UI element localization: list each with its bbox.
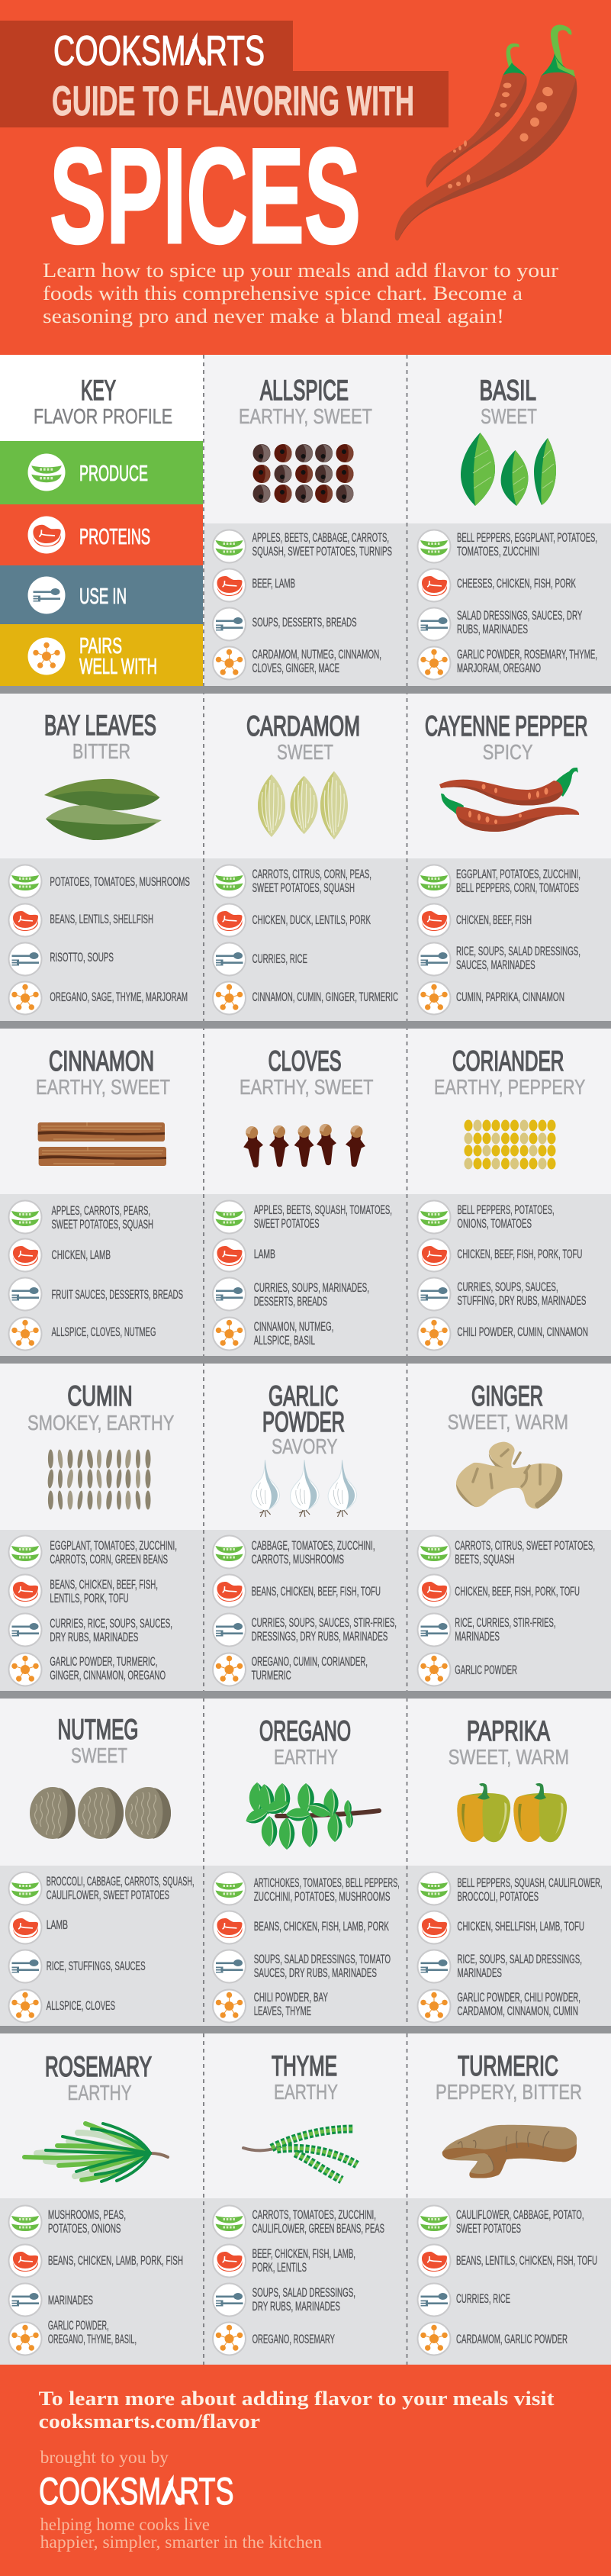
nutmeg flavor: SWEET bbox=[71, 1744, 127, 1767]
key row: produce bbox=[0, 441, 203, 504]
pairs well with bbox=[9, 2318, 137, 2355]
call to action bbox=[39, 2388, 555, 2433]
produce bbox=[418, 530, 597, 563]
proteins bbox=[418, 1911, 584, 1944]
proteins: BEEF, LAMB bbox=[252, 576, 295, 591]
bay leaves flavor: BITTER bbox=[72, 739, 130, 763]
use in bbox=[9, 1277, 183, 1311]
pairs well with: OREGANO, ROSEMARY bbox=[252, 2332, 335, 2346]
illustration: basil leaves bbox=[461, 433, 556, 506]
ginger flavor: SWEET, WARM bbox=[448, 1410, 568, 1434]
flavor profile label: FLAVOR PROFILE bbox=[34, 404, 172, 428]
panel: key bbox=[0, 374, 203, 686]
thyme flavor: EARTHY bbox=[274, 2080, 338, 2104]
pairs well with: CLOVES, GINGER, MACE bbox=[252, 661, 339, 675]
panel: cumin bbox=[9, 1380, 177, 1686]
produce bbox=[9, 1872, 194, 1905]
proteins bbox=[213, 1911, 389, 1944]
use in bbox=[213, 1613, 397, 1647]
produce: BEETS, SQUASH bbox=[455, 1552, 514, 1567]
produce: BROCCOLI, CABBAGE, CARROTS, SQUASH, bbox=[47, 1874, 194, 1889]
use in: RUBS, MARINADES bbox=[457, 622, 528, 636]
intro paragraph: Learn how to spice up your meals and add flavor to your bbox=[43, 259, 558, 282]
proteins bbox=[213, 1239, 275, 1271]
tagline bbox=[40, 2515, 323, 2552]
proteins: CHICKEN, BEEF, FISH bbox=[456, 913, 532, 927]
key row: produce: PRODUCE bbox=[79, 462, 148, 486]
produce bbox=[9, 1535, 177, 1569]
illustration: garlic bulbs bbox=[251, 1460, 357, 1517]
use in: MARINADES bbox=[48, 2293, 93, 2307]
oregano flavor: EARTHY bbox=[274, 1745, 338, 1769]
key row: pairs well with: WELL WITH bbox=[79, 655, 157, 679]
use in: MARINADES bbox=[455, 1629, 500, 1644]
panel: oregano bbox=[213, 1715, 400, 2022]
use in: DRY RUBS, MARINADES bbox=[252, 2299, 340, 2314]
pairs well with: ALLSPICE, BASIL bbox=[254, 1333, 315, 1348]
illustration: cloves bbox=[241, 1123, 367, 1168]
panel: cayenne pepper bbox=[418, 710, 587, 1015]
pairs well with bbox=[9, 1317, 156, 1351]
produce: SWEET POTATOES, SQUASH bbox=[52, 1217, 153, 1232]
key row: proteins: PROTEINS bbox=[79, 525, 150, 549]
panel: coriander bbox=[418, 1045, 588, 1351]
pairs well with: ALLSPICE, CLOVES, NUTMEG bbox=[52, 1325, 156, 1339]
proteins: BEANS, CHICKEN, FISH, LAMB, PORK bbox=[254, 1919, 389, 1934]
intro paragraph bbox=[43, 259, 558, 327]
call to action: To learn more about adding flavor to your meals visit bbox=[39, 2388, 555, 2410]
key heading: KEY bbox=[81, 374, 116, 406]
proteins bbox=[418, 2245, 597, 2277]
cardamom name: CARDAMOM bbox=[246, 710, 360, 742]
pairs well with bbox=[213, 1990, 328, 2022]
cardamom flavor: SWEET bbox=[277, 740, 333, 764]
produce: ONIONS, TOMATOES bbox=[457, 1216, 532, 1231]
use in bbox=[213, 607, 357, 641]
use in: RISOTTO, SOUPS bbox=[50, 950, 114, 964]
pairs well with: OREGANO, CUMIN, CORIANDER, bbox=[252, 1654, 368, 1669]
use in: CURRIES, RICE bbox=[252, 952, 307, 966]
proteins bbox=[418, 1239, 582, 1271]
tagline: helping home cooks live bbox=[40, 2515, 210, 2534]
proteins: BEANS, CHICKEN, LAMB, PORK, FISH bbox=[48, 2253, 183, 2268]
pairs well with: CHILI POWDER, BAY bbox=[254, 1990, 328, 2004]
produce bbox=[213, 1201, 392, 1233]
use in: CURRIES, RICE bbox=[456, 2291, 510, 2306]
use in: CURRIES, SOUPS, SAUCES, STIR-FRIES, bbox=[252, 1615, 397, 1630]
illustration: nutmeg seeds bbox=[30, 1787, 171, 1839]
pairs well with bbox=[213, 2323, 335, 2355]
use in: RICE, STUFFINGS, SAUCES bbox=[47, 1959, 146, 1973]
intro paragraph: foods with this comprehensive spice chart. Become a bbox=[43, 282, 523, 304]
use in bbox=[418, 943, 580, 975]
produce: MUSHROOMS, PEAS, bbox=[48, 2207, 126, 2222]
use in: SOUPS, SALAD DRESSINGS, TOMATO bbox=[254, 1952, 391, 1966]
pairs well with: TURMERIC bbox=[252, 1668, 291, 1682]
use in bbox=[9, 1613, 172, 1647]
turmeric name: TURMERIC bbox=[458, 2050, 558, 2082]
produce: ZUCCHINI, POTATOES, MUSHROOMS bbox=[254, 1889, 391, 1904]
proteins bbox=[9, 903, 153, 937]
panel: ginger bbox=[418, 1380, 595, 1686]
pairs well with: GARLIC POWDER, TURMERIC, bbox=[50, 1654, 157, 1669]
produce bbox=[213, 2205, 384, 2239]
use in: SAUCES, MARINADES bbox=[456, 958, 535, 972]
panel: garlic powder bbox=[213, 1380, 397, 1686]
use in: DRY RUBS, MARINADES bbox=[50, 1630, 138, 1644]
cumin name: CUMIN bbox=[67, 1380, 133, 1412]
rosemary flavor: EARTHY bbox=[67, 2081, 132, 2104]
produce: CAULIFLOWER, GREEN BEANS, PEAS bbox=[252, 2221, 384, 2236]
pairs well with: CINNAMON, CUMIN, GINGER, TURMERIC bbox=[252, 990, 398, 1004]
brought to you by: brought to you by bbox=[40, 2448, 169, 2467]
proteins bbox=[418, 1575, 580, 1607]
proteins bbox=[9, 1575, 158, 1607]
produce: SQUASH, SWEET POTATOES, TURNIPS bbox=[252, 544, 392, 559]
produce: ARTICHOKES, TOMATOES, BELL PEPPERS, bbox=[254, 1876, 400, 1890]
produce bbox=[213, 1872, 400, 1905]
thyme name: THYME bbox=[272, 2050, 337, 2082]
use in: SOUPS, DESSERTS, BREADS bbox=[252, 615, 357, 630]
panel: turmeric bbox=[418, 2050, 597, 2355]
key row: use in bbox=[0, 565, 203, 624]
illustration: bay leaves bbox=[44, 779, 162, 840]
illustration: allspice berries bbox=[253, 444, 354, 503]
produce: CAULIFLOWER, SWEET POTATOES bbox=[47, 1888, 169, 1902]
footer band bbox=[0, 2365, 611, 2576]
use in bbox=[213, 943, 307, 975]
produce: EGGPLANT, TOMATOES, ZUCCHINI, bbox=[50, 1538, 177, 1553]
illustration: oregano sprig bbox=[243, 1782, 379, 1850]
produce bbox=[9, 2205, 126, 2239]
tagline: happier, simpler, smarter in the kitchen bbox=[40, 2533, 323, 2552]
produce: SWEET POTATOES bbox=[456, 2221, 521, 2236]
proteins: LAMB bbox=[47, 1918, 68, 1932]
pairs well with bbox=[9, 981, 188, 1015]
pairs well with: GARLIC POWDER bbox=[455, 1663, 517, 1677]
garlic powder name bbox=[262, 1380, 345, 1438]
produce bbox=[418, 2205, 584, 2239]
pairs well with: GARLIC POWDER, bbox=[48, 2318, 109, 2333]
proteins bbox=[418, 569, 576, 601]
proteins bbox=[213, 569, 295, 601]
produce bbox=[213, 1535, 375, 1569]
pairs well with bbox=[418, 647, 597, 679]
illustration: coriander seeds bbox=[464, 1120, 555, 1169]
footer logo: COOKSMARTS bbox=[39, 2470, 234, 2513]
use in bbox=[213, 1277, 369, 1311]
proteins: BEANS, LENTILS, SHELLFISH bbox=[50, 912, 153, 926]
pairs well with bbox=[418, 1317, 588, 1351]
use in bbox=[418, 1277, 586, 1311]
paprika flavor: SWEET, WARM bbox=[449, 1745, 569, 1769]
ginger name: GINGER bbox=[471, 1380, 543, 1412]
panel: cloves bbox=[213, 1045, 392, 1351]
illustration: cumin seeds bbox=[47, 1449, 151, 1510]
illustration: ginger root bbox=[456, 1442, 562, 1509]
proteins bbox=[9, 2245, 183, 2277]
produce: POTATOES, TOMATOES, MUSHROOMS bbox=[50, 874, 190, 889]
proteins bbox=[418, 903, 532, 937]
garlic powder name: POWDER bbox=[262, 1406, 345, 1438]
produce: CARROTS, MUSHROOMS bbox=[252, 1552, 344, 1567]
produce: APPLES, BEETS, SQUASH, TOMATOES, bbox=[254, 1203, 392, 1217]
call to action: cooksmarts.com/flavor bbox=[39, 2410, 260, 2433]
oregano name: OREGANO bbox=[259, 1715, 351, 1747]
use in: DRESSINGS, DRY RUBS, MARINADES bbox=[252, 1629, 388, 1644]
pairs well with: GINGER, CINNAMON, OREGANO bbox=[50, 1668, 166, 1682]
illustration: paprika peppers bbox=[457, 1783, 567, 1842]
produce bbox=[418, 1535, 595, 1569]
use in bbox=[213, 1950, 391, 1982]
guide band bbox=[0, 71, 449, 127]
produce: CARROTS, CITRUS, CORN, PEAS, bbox=[252, 867, 371, 881]
pairs well with: OREGANO, THYME, BASIL, bbox=[48, 2332, 137, 2346]
garlic powder name: GARLIC bbox=[269, 1380, 339, 1412]
proteins: BEANS, CHICKEN, BEEF, FISH, TOFU bbox=[252, 1584, 381, 1599]
panel: nutmeg bbox=[9, 1713, 194, 2022]
pairs well with bbox=[9, 1990, 115, 2022]
produce: CARROTS, TOMATOES, ZUCCHINI, bbox=[252, 2207, 376, 2222]
produce bbox=[418, 1201, 555, 1233]
proteins bbox=[213, 2245, 355, 2277]
illustration: cardamom pods bbox=[258, 771, 348, 839]
produce bbox=[213, 530, 392, 563]
basil name: BASIL bbox=[479, 374, 536, 406]
produce: BROCCOLI, POTATOES bbox=[457, 1889, 539, 1904]
produce: SWEET POTATOES, SQUASH bbox=[252, 881, 355, 895]
pairs well with bbox=[418, 2323, 568, 2355]
key row: pairs well with: PAIRS bbox=[79, 634, 122, 658]
produce: POTATOES, ONIONS bbox=[48, 2221, 121, 2236]
produce bbox=[418, 1872, 603, 1905]
panel: cardamom bbox=[213, 710, 398, 1015]
intro paragraph: seasoning pro and never make a bland meal again! bbox=[43, 305, 504, 327]
pairs well with bbox=[213, 1317, 333, 1351]
proteins: LAMB bbox=[254, 1247, 275, 1261]
produce: TOMATOES, ZUCCHINI bbox=[457, 544, 539, 559]
cinnamon name: CINNAMON bbox=[49, 1045, 154, 1077]
header banner bbox=[0, 21, 577, 327]
produce bbox=[213, 865, 371, 897]
use in: FRUIT SAUCES, DESSERTS, BREADS bbox=[52, 1287, 183, 1302]
panel: thyme bbox=[213, 2050, 384, 2355]
bay leaves name: BAY LEAVES bbox=[44, 709, 156, 741]
produce: APPLES, BEETS, CABBAGE, CARROTS, bbox=[252, 530, 389, 545]
use in bbox=[9, 2283, 93, 2317]
cloves name: CLOVES bbox=[269, 1045, 342, 1077]
illustration: chili peppers bbox=[395, 25, 577, 240]
produce: SWEET POTATOES bbox=[254, 1216, 319, 1231]
use in bbox=[9, 1950, 146, 1982]
pairs well with bbox=[213, 1653, 368, 1686]
pairs well with: MARJORAM, OREGANO bbox=[457, 661, 541, 675]
proteins bbox=[213, 1575, 381, 1607]
use in: DESSERTS, BREADS bbox=[254, 1294, 327, 1309]
panel: allspice bbox=[213, 374, 392, 679]
proteins: PORK, LENTILS bbox=[252, 2260, 307, 2275]
cayenne pepper flavor: SPICY bbox=[483, 740, 533, 764]
proteins: BEEF, CHICKEN, FISH, LAMB, bbox=[252, 2246, 355, 2261]
basil flavor: SWEET bbox=[481, 404, 537, 428]
use in bbox=[418, 1613, 556, 1647]
pairs well with bbox=[418, 981, 564, 1015]
illustration: rosemary sprig bbox=[24, 2124, 168, 2182]
illustration: cayenne peppers bbox=[439, 768, 579, 832]
garlic powder flavor: SAVORY bbox=[272, 1435, 337, 1458]
produce bbox=[418, 865, 580, 897]
chart backgrounds bbox=[0, 355, 611, 2365]
pairs well with: ALLSPICE, CLOVES bbox=[47, 1998, 115, 2013]
proteins: CHICKEN, DUCK, LENTILS, PORK bbox=[252, 913, 371, 927]
proteins: BEANS, CHICKEN, BEEF, FISH, bbox=[50, 1577, 158, 1592]
pairs well with bbox=[418, 1653, 517, 1686]
pairs well with bbox=[418, 1990, 580, 2022]
pairs well with bbox=[213, 981, 398, 1015]
panel: paprika bbox=[418, 1715, 603, 2022]
use in bbox=[9, 943, 114, 975]
key row: use in: USE IN bbox=[79, 584, 127, 609]
logo band bbox=[0, 21, 293, 71]
panel: basil bbox=[418, 374, 597, 679]
pairs well with: CINNAMON, NUTMEG, bbox=[254, 1319, 333, 1334]
proteins bbox=[9, 1239, 111, 1271]
produce bbox=[9, 865, 190, 897]
pairs well with: CARDAMOM, NUTMEG, CINNAMON, bbox=[252, 647, 381, 662]
paprika name: PAPRIKA bbox=[467, 1715, 550, 1747]
pairs well with bbox=[9, 1653, 166, 1686]
use in: CURRIES, RICE, SOUPS, SAUCES, bbox=[50, 1616, 172, 1631]
panel: bay leaves bbox=[9, 709, 190, 1015]
use in bbox=[213, 2283, 355, 2317]
pairs well with bbox=[213, 647, 381, 679]
proteins: CHICKEN, LAMB bbox=[52, 1248, 111, 1262]
logo: cook smarts: COOKSMARTS bbox=[53, 27, 265, 74]
cumin flavor: SMOKEY, EARTHY bbox=[27, 1411, 174, 1435]
title: spices: SPICES bbox=[50, 120, 361, 272]
proteins bbox=[9, 1911, 68, 1944]
key row: proteins bbox=[0, 504, 203, 565]
allspice name: ALLSPICE bbox=[260, 374, 349, 406]
use in bbox=[418, 2283, 510, 2317]
allspice flavor: EARTHY, SWEET bbox=[239, 404, 372, 428]
pairs well with: OREGANO, SAGE, THYME, MARJORAM bbox=[50, 990, 188, 1004]
cinnamon flavor: EARTHY, SWEET bbox=[36, 1075, 170, 1099]
illustration: thyme sprig bbox=[243, 2129, 357, 2180]
use in bbox=[418, 1950, 582, 1982]
illustration: cinnamon sticks bbox=[38, 1122, 166, 1166]
produce bbox=[9, 1201, 153, 1233]
proteins bbox=[213, 903, 371, 937]
pairs well with: LEAVES, THYME bbox=[254, 2004, 311, 2018]
footer bbox=[0, 2365, 611, 2576]
use in: CURRIES, SOUPS, MARINADES, bbox=[254, 1280, 369, 1295]
illustration: turmeric root bbox=[442, 2125, 577, 2178]
panel: rosemary bbox=[9, 2050, 183, 2355]
produce: CARROTS, CORN, GREEN BEANS bbox=[50, 1552, 168, 1567]
produce: APPLES, CARROTS, PEARS, bbox=[52, 1203, 150, 1218]
panel: cinnamon bbox=[9, 1045, 183, 1351]
use in: MARINADES bbox=[457, 1966, 502, 1980]
cloves flavor: EARTHY, SWEET bbox=[240, 1075, 374, 1099]
use in: SOUPS, SALAD DRESSINGS, bbox=[252, 2285, 355, 2300]
rosemary name: ROSEMARY bbox=[45, 2050, 152, 2082]
proteins: LENTILS, PORK, TOFU bbox=[50, 1591, 129, 1605]
use in: SAUCES, DRY RUBS, MARINADES bbox=[254, 1966, 377, 1980]
key row: pairs well with bbox=[0, 624, 203, 686]
produce: CABBAGE, TOMATOES, ZUCCHINI, bbox=[252, 1538, 375, 1553]
nutmeg name: NUTMEG bbox=[58, 1713, 138, 1745]
use in bbox=[418, 607, 582, 641]
